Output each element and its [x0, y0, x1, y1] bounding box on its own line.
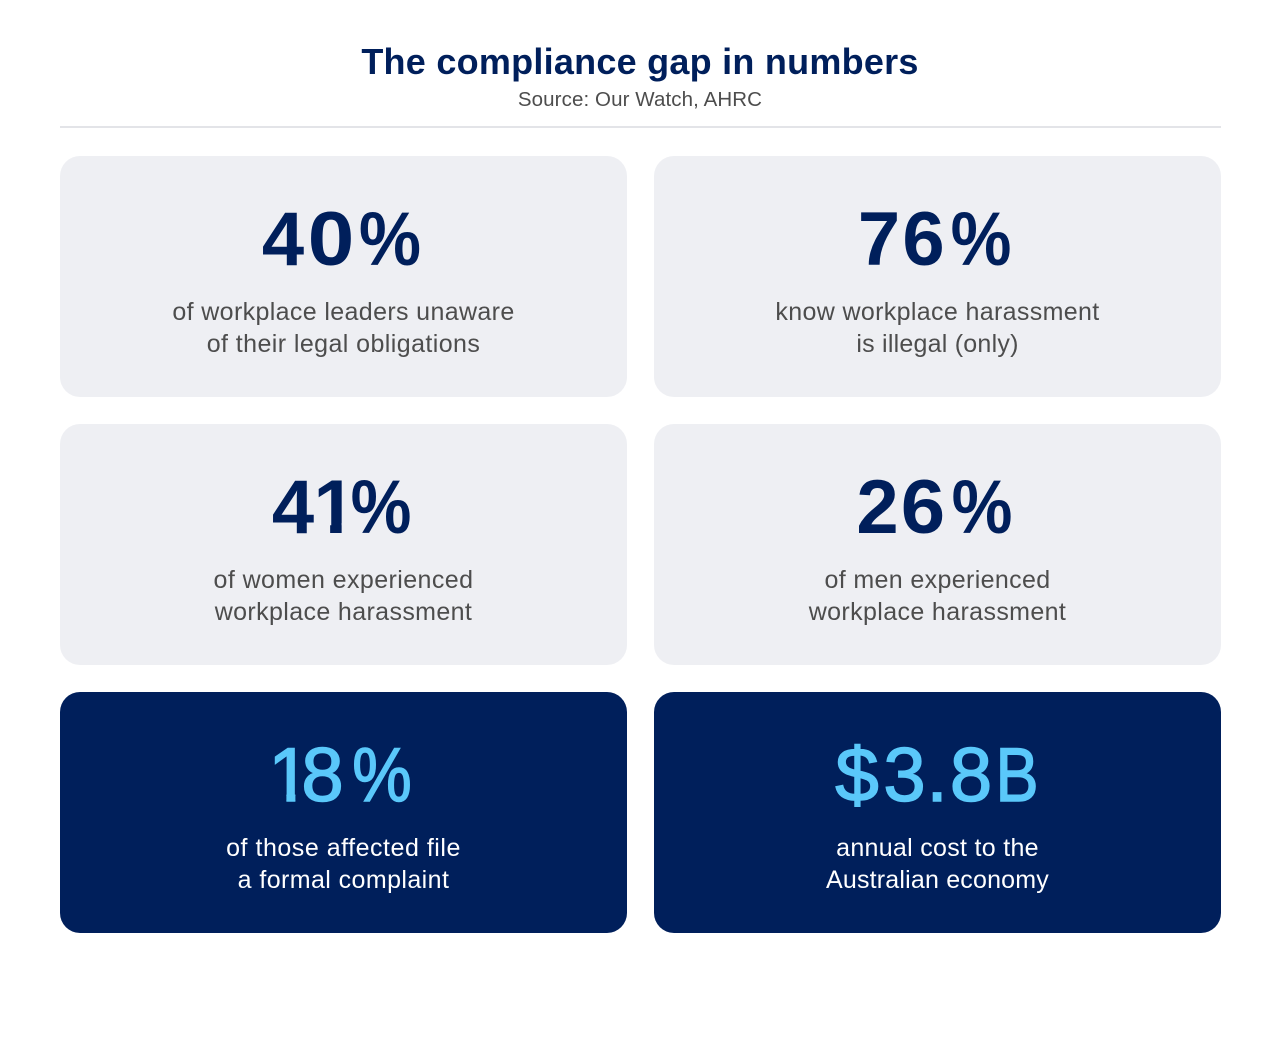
- number: $3.8B: B: [995, 733, 1039, 818]
- description: Australian economy: [826, 866, 1049, 894]
- description: of their legal obligations: [207, 330, 480, 358]
- description: [226, 834, 461, 894]
- number: 76%: 6: [902, 197, 945, 282]
- number: 76%: [858, 197, 1011, 282]
- number: 18%: %: [352, 733, 411, 818]
- number: 41%: [272, 465, 411, 550]
- source line: Source: Our Watch, AHRC: [518, 88, 762, 111]
- description: of women experienced: [214, 566, 473, 594]
- number: 40%: 0: [308, 197, 354, 282]
- stat card: $3.8B: [654, 692, 1221, 933]
- number: 40%: 4: [262, 197, 304, 282]
- description: of those affected file: [226, 834, 461, 862]
- description: know workplace harassment: [775, 298, 1100, 326]
- number: $3.8B: 3: [883, 733, 926, 818]
- number: $3.8B: .: [926, 733, 948, 818]
- number: 26%: [856, 465, 1012, 550]
- number: 18%: 8: [301, 733, 344, 818]
- description: [214, 566, 473, 626]
- number: 40%: [262, 197, 421, 282]
- stat card: 18%: [60, 692, 627, 933]
- description: [808, 566, 1066, 626]
- number: 26%: %: [952, 465, 1012, 550]
- number: 18%: [274, 733, 411, 818]
- description: is illegal (only): [856, 330, 1019, 358]
- description: [826, 834, 1049, 894]
- number: 41%: 1: [314, 465, 356, 550]
- stat card: 40%: [60, 156, 627, 397]
- number: 26%: 6: [901, 465, 945, 550]
- description: [775, 298, 1100, 358]
- number: 76%: %: [951, 197, 1011, 282]
- description: workplace harassment: [809, 598, 1066, 626]
- title: The compliance gap in numbers: [361, 41, 919, 82]
- description: [172, 298, 515, 358]
- number: $3.8B: $: [835, 733, 879, 818]
- description: a formal complaint: [238, 866, 449, 894]
- description: of men experienced: [824, 566, 1051, 594]
- description: of workplace leaders unaware: [172, 298, 515, 326]
- number: 40%: %: [359, 197, 421, 282]
- number: 41%: %: [351, 465, 411, 550]
- number: $3.8B: [835, 733, 1039, 818]
- number: 76%: 7: [858, 197, 900, 282]
- description: annual cost to the: [836, 834, 1039, 862]
- stat card: 76%: [654, 156, 1221, 397]
- description: workplace harassment: [215, 598, 472, 626]
- number: 26%: 2: [856, 465, 899, 550]
- number: 18%: 1: [268, 733, 311, 818]
- number: $3.8B: 8: [950, 733, 992, 818]
- number: 41%: 4: [272, 465, 314, 550]
- stat card: 41%: [60, 424, 627, 665]
- stat card: 26%: [654, 424, 1221, 665]
